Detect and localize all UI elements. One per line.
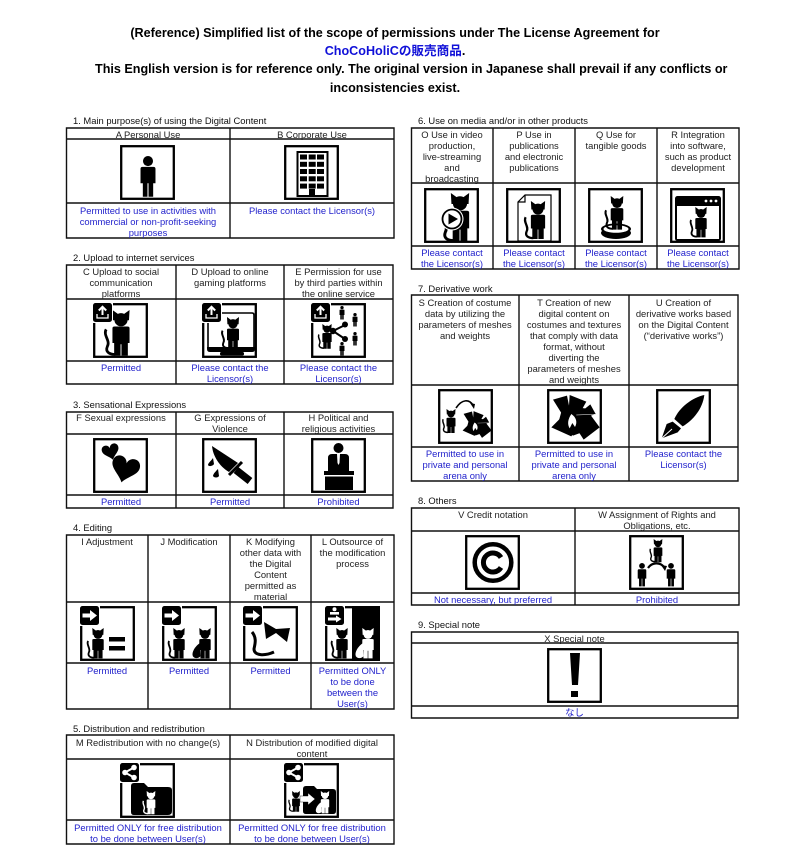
status: K: Permitted <box>250 665 291 676</box>
icon: exclamation mark <box>547 648 602 703</box>
status: L <box>319 665 386 709</box>
icon: share modified <box>284 763 339 818</box>
cell: L header <box>320 536 385 569</box>
status: E: Licensor(s) <box>315 373 362 384</box>
status: J: Permitted <box>169 665 209 676</box>
cell: O header: live-streaming <box>423 151 481 162</box>
status: A <box>80 205 216 238</box>
status: L: User(s) <box>337 698 368 709</box>
status: X: なし <box>565 707 584 718</box>
icon: costume from cat <box>438 389 493 444</box>
icon: publication <box>506 188 561 243</box>
cell: H header: H Political and <box>309 412 368 423</box>
cell: L header: the modification <box>320 547 385 558</box>
status: N: Permitted ONLY for free distribution <box>238 822 386 833</box>
status: R: the Licensor(s) <box>667 258 729 269</box>
cell: U header: (“derivative works”) <box>644 330 723 341</box>
status: R <box>657 247 739 269</box>
icon: folder share <box>120 763 175 818</box>
icon: person <box>120 145 175 200</box>
cell: K header: other data with <box>240 547 301 558</box>
cell: K header: permitted as <box>245 580 296 591</box>
status: C: Permitted <box>101 362 141 373</box>
heading: 1. Main purpose(s) of using the Digital Content <box>73 115 266 126</box>
cell: C header: communication <box>89 277 153 288</box>
status: T: private and personal <box>532 459 616 470</box>
cell: M header: M Redistribution with no change(s) <box>76 737 220 748</box>
cell: W header <box>575 509 739 531</box>
panel: 4. editing <box>66 522 395 710</box>
heading: 5. Distribution and redistribution <box>73 723 205 734</box>
icon: fountain pen <box>656 389 711 444</box>
cell: R header: development <box>671 162 725 173</box>
cell: U header: on the Digital Content <box>638 319 729 330</box>
cell: Q header: Q Use for <box>596 129 636 140</box>
cell: K header: Content <box>254 569 287 580</box>
cell: T header: and weights <box>549 374 599 385</box>
status: U <box>629 448 738 470</box>
cell: G header: Violence <box>212 423 248 434</box>
status: B: Please contact the Licensor(s) <box>249 205 375 216</box>
status: U: Please contact the <box>645 448 722 459</box>
cell: P header: publications <box>509 162 559 173</box>
panel: 3. sensational expressions <box>66 399 394 509</box>
status: P <box>493 247 575 269</box>
icon: copyright <box>465 535 520 590</box>
icon: outsource <box>325 606 380 661</box>
cell: G header <box>194 412 266 434</box>
cell: E header: E Permission for use <box>295 266 382 277</box>
status: M: to be done between User(s) <box>90 833 206 844</box>
status: O: Please contact <box>421 247 483 258</box>
cell: D header: gaming platforms <box>194 277 266 288</box>
cell: K header: the Digital <box>250 558 291 569</box>
heading: 2. Upload to internet services <box>73 252 194 263</box>
status: N: to be done between User(s) <box>254 833 370 844</box>
cell: T header: diverting the <box>548 352 600 363</box>
cell: O header: O Use in video <box>421 129 483 140</box>
heading: 9. Special note <box>418 619 480 630</box>
cell: W header: W Assignment of Rights and <box>598 509 716 520</box>
cell: O header: broadcasting <box>425 173 479 184</box>
status: Q: the Licensor(s) <box>585 258 647 269</box>
status: S: Permitted to use in <box>426 448 504 459</box>
cell: T header: T Creation of new <box>537 297 611 308</box>
status: N <box>238 822 386 844</box>
icon: figure on base <box>588 188 643 243</box>
status: E: Please contact the <box>300 362 377 373</box>
panel: 2. upload <box>66 252 394 385</box>
status: V: Not necessary, but preferred <box>434 594 552 605</box>
status: F: Permitted <box>101 496 141 507</box>
cell: T header: digital content on <box>539 308 609 319</box>
status: T: arena only <box>552 470 596 481</box>
title: This English version is for reference only. The original version in Japanese shall prevail if any conflicts or <box>95 62 727 76</box>
cell: D header <box>191 266 269 288</box>
status: M: Permitted ONLY for free distribution <box>74 822 222 833</box>
cell: F header: F Sexual expressions <box>76 412 166 423</box>
cell: S header: and weights <box>440 330 490 341</box>
cell: P header: and electronic <box>505 151 563 162</box>
status: D <box>191 362 269 384</box>
icon: software window <box>670 188 725 243</box>
panel: 5. distribution <box>66 723 395 845</box>
status: S: arena only <box>443 470 487 481</box>
status: P: Please contact <box>503 247 565 258</box>
cell: S header: S Creation of costume <box>419 297 511 308</box>
icon: upload cat <box>93 303 148 358</box>
icon: ears and tail material <box>243 606 298 661</box>
cell: K header <box>240 536 301 602</box>
status: E <box>300 362 377 384</box>
panel: 7. derivative work <box>411 282 739 481</box>
cell: G header: G Expressions of <box>194 412 266 423</box>
icon: lectern speaker <box>311 438 366 493</box>
status: G: Permitted <box>210 496 250 507</box>
cell: N header: content <box>297 748 327 759</box>
status: T <box>519 448 629 481</box>
cell: Q header: tangible goods <box>586 140 646 151</box>
cell: E header: the online service <box>302 288 375 299</box>
heading: 6. Use on media and/or in other products <box>418 115 588 126</box>
status: A: purposes <box>129 227 167 238</box>
icon: modification two cats <box>162 606 217 661</box>
panel: 6. use on media <box>410 115 740 270</box>
cell: O header: production, <box>429 140 475 151</box>
panel: 1. main purpose <box>66 115 395 239</box>
cell: I header: I Adjustment <box>81 536 133 547</box>
cell: O header <box>421 129 483 184</box>
heading: 7. Derivative work <box>418 283 493 294</box>
cell: U header: derivative works based <box>636 308 731 319</box>
status: U: Licensor(s) <box>660 459 707 470</box>
status: D: Licensor(s) <box>207 373 253 384</box>
cell: A header: A Personal Use <box>116 129 180 140</box>
cell: W header: Obligations, etc. <box>623 520 691 531</box>
status: W: Prohibited <box>636 594 678 605</box>
cell: C header: platforms <box>102 288 140 299</box>
cell: H header <box>302 412 375 434</box>
status: L: between the <box>327 687 378 698</box>
status: Q: Please contact <box>585 247 647 258</box>
status: O: the Licensor(s) <box>421 258 483 269</box>
cell: T header: costumes and textures <box>527 319 621 330</box>
cell: T header: that comply with data <box>530 330 618 341</box>
cell: O header: and <box>444 162 460 173</box>
heading: 4. Editing <box>73 522 112 533</box>
status: L: to be done <box>330 676 375 687</box>
status: T: Permitted to use in <box>535 448 613 459</box>
status: R: Please contact <box>667 247 729 258</box>
status: M <box>74 822 222 844</box>
cell: K header: K Modifying <box>246 536 295 547</box>
cell: X header: X Special note <box>544 633 605 644</box>
icon: video play cat <box>424 188 479 243</box>
icon: third parties sharing <box>311 303 366 358</box>
status: S: private and personal <box>423 459 507 470</box>
icon: upload to gaming platform <box>202 303 257 358</box>
cell: R header: such as product <box>665 151 731 162</box>
panel: 8. others <box>411 495 739 605</box>
icon: office building <box>284 145 339 200</box>
cell: V header: V Credit notation <box>458 509 528 520</box>
cell: C header <box>83 266 159 299</box>
panel: 9. special note <box>411 619 739 718</box>
cell: P header: publications <box>509 140 559 151</box>
cell: R header <box>665 129 732 173</box>
cell: Q header <box>586 129 646 151</box>
cell: R header: into software, <box>670 140 726 151</box>
status: A: Permitted to use in activities with <box>80 205 216 216</box>
status: A: commercial or non-profit-seeking <box>80 216 216 227</box>
cell: S header <box>411 297 519 341</box>
cell: U header: U Creation of <box>656 297 711 308</box>
cell: N header: N Distribution of modified digital <box>246 737 378 748</box>
status: L: Permitted ONLY <box>319 665 386 676</box>
status: O <box>411 247 493 269</box>
cell: E header: by third parties within <box>294 277 383 288</box>
status: H: Prohibited <box>317 496 360 507</box>
status: S <box>411 448 519 481</box>
status: I: Permitted <box>87 665 127 676</box>
cell: P header <box>505 129 563 173</box>
icon: adjustment equals <box>80 606 135 661</box>
cell: U header <box>629 297 738 341</box>
cell: E header <box>294 266 383 299</box>
cell: L header: L Outsource of <box>322 536 383 547</box>
cell: L header: process <box>336 558 369 569</box>
cell: T header: format, without <box>543 341 605 352</box>
status: P: the Licensor(s) <box>503 258 565 269</box>
cell: H header: religious activities <box>302 423 375 434</box>
cell: R header: R Integration <box>671 129 725 140</box>
heading: 3. Sensational Expressions <box>73 399 186 410</box>
title: inconsistencies exist. <box>330 81 460 95</box>
cell: S header: parameters of meshes <box>418 319 512 330</box>
cell: S header: data by utilizing the <box>425 308 505 319</box>
status: Q <box>575 247 657 269</box>
title <box>95 26 728 95</box>
cell: B header: B Corporate Use <box>277 129 347 140</box>
cell: K header: material <box>254 591 287 602</box>
cell: J header: J Modification <box>160 536 218 547</box>
icon: knife <box>202 438 257 493</box>
title: ChoCoHoliCの販売商品. <box>325 44 465 58</box>
cell: T header: parameters of meshes <box>527 363 621 374</box>
cell: P header: P Use in <box>516 129 552 140</box>
cell: T header <box>519 297 629 385</box>
cell: N header <box>246 737 378 759</box>
cell: C header: C Upload to social <box>83 266 159 277</box>
icon: assignment of rights <box>629 535 684 590</box>
heading: 8. Others <box>418 495 457 506</box>
icon: hearts <box>93 438 148 493</box>
cell: D header: D Upload to online <box>191 266 269 277</box>
title: (Reference) Simplified list of the scope of permissions under The License Agreement for <box>130 26 660 40</box>
status: D: Please contact the <box>191 362 269 373</box>
icon: costume <box>547 389 602 444</box>
